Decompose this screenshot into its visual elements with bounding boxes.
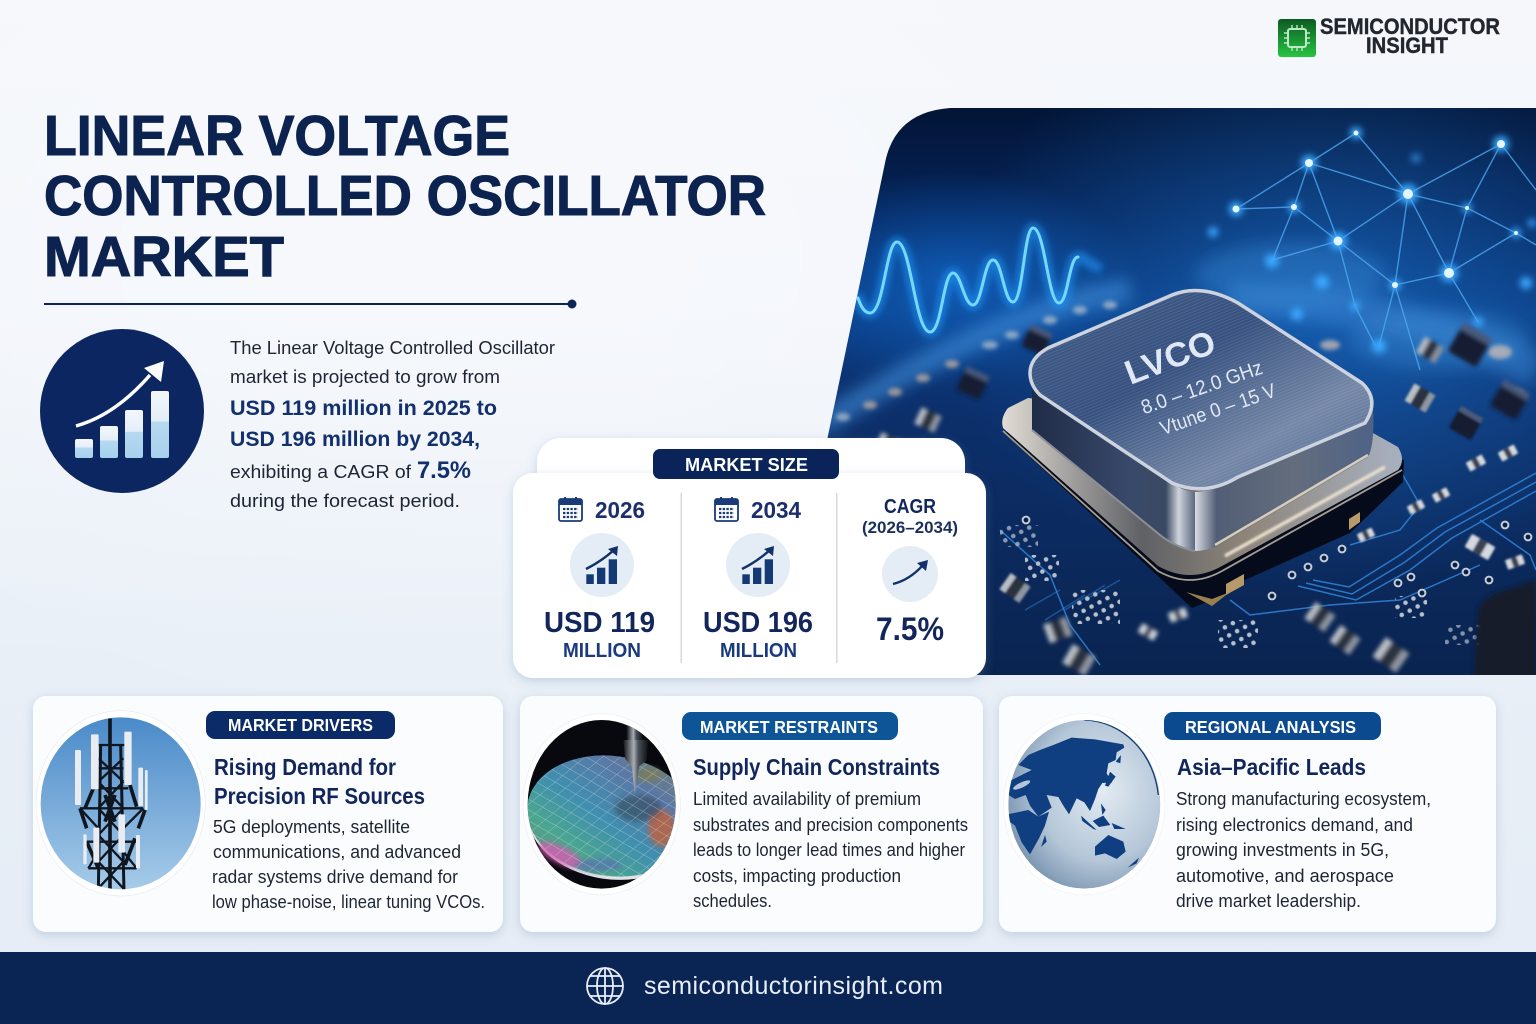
logo: Semiconductor Insight xyxy=(1278,14,1500,58)
panel: market restraints: substrates and precision components xyxy=(693,815,968,835)
panel: market restraints: Limited availability of premium xyxy=(693,789,921,809)
column CAGR xyxy=(862,496,958,647)
panel: regional analysis: REGIONAL ANALYSIS xyxy=(1185,717,1356,737)
LVCO chip xyxy=(1002,290,1404,608)
title xyxy=(44,104,766,289)
panel: market restraints: leads to longer lead times and higher xyxy=(693,840,965,860)
column 2034: USD 196 xyxy=(703,607,813,639)
panel: market restraints: Supply Chain Constraints xyxy=(693,754,940,780)
chip markings: Vtune 0 – 15 V xyxy=(1157,380,1279,440)
board traces xyxy=(1000,470,1536,665)
title: MARKET xyxy=(44,225,284,289)
image: silicon wafer with probe xyxy=(519,714,704,895)
panel: market restraints: schedules. xyxy=(693,891,772,911)
heading pill: MARKET SIZE xyxy=(685,455,808,475)
title rule xyxy=(44,300,576,308)
chip top face xyxy=(1030,290,1372,489)
panel: market restraints xyxy=(519,696,983,932)
hero image: LVCO chip on circuit board xyxy=(760,108,1536,680)
board components near xyxy=(999,383,1525,603)
icon: growth chart in navy circle xyxy=(40,329,204,493)
intro text: USD 196 million by 2034, xyxy=(230,428,480,451)
title: CONTROLLED OSCILLATOR xyxy=(44,164,766,228)
solder pad clusters xyxy=(1000,525,1485,648)
panel: market drivers: Precision RF Sources xyxy=(214,783,425,809)
chip walls xyxy=(1032,385,1195,551)
column 2026: 2026 xyxy=(595,497,645,523)
image: cell tower xyxy=(36,711,207,896)
chip markings: LVCO xyxy=(1120,323,1221,393)
column CAGR: 7.5% xyxy=(876,611,944,647)
card tab xyxy=(537,438,965,508)
waveform xyxy=(858,228,1097,332)
dividers xyxy=(680,493,838,663)
panel: market drivers: Rising Demand for xyxy=(214,754,396,780)
title: LINEAR VOLTAGE xyxy=(44,104,510,168)
column CAGR: (2026–2034) xyxy=(862,519,958,537)
panel: market drivers: 5G deployments, satellite xyxy=(213,817,410,837)
image: globe xyxy=(1004,714,1165,895)
network nodes xyxy=(1208,127,1536,353)
dark block bottom right xyxy=(1474,580,1536,680)
website: semiconductorinsight.com xyxy=(644,972,943,1000)
intro text xyxy=(230,337,555,511)
intro text: exhibiting a CAGR of xyxy=(230,461,412,482)
column 2034: MILLION xyxy=(720,640,797,662)
market size card xyxy=(513,438,986,678)
column 2026: USD 119 xyxy=(544,607,655,639)
column 2034: 2034 xyxy=(751,497,801,523)
column 2026: MILLION xyxy=(563,640,641,662)
chip underside and shadow xyxy=(1003,432,1404,608)
panel: market drivers: radar systems drive demand for xyxy=(212,867,458,887)
circuit network xyxy=(1236,133,1536,370)
panel: regional analysis: drive market leadership. xyxy=(1176,891,1361,911)
logo: Semiconductor Insight: SEMICONDUCTOR xyxy=(1320,14,1500,39)
panel: market drivers xyxy=(33,696,503,932)
panel: regional analysis: Asia–Pacific Leads xyxy=(1177,754,1366,780)
panel: market drivers: MARKET DRIVERS xyxy=(228,715,373,735)
footer bar xyxy=(0,952,1536,1024)
blurred pads along the arc xyxy=(836,301,1525,421)
chip flange xyxy=(1002,398,1402,575)
panel: market drivers: communications, and advanced xyxy=(213,842,461,862)
panel: market restraints: costs, impacting production xyxy=(693,866,901,886)
chip markings xyxy=(1124,332,1273,434)
column CAGR: CAGR xyxy=(884,496,936,518)
board components far xyxy=(876,321,1532,438)
panel: regional analysis: automotive, and aerospace xyxy=(1176,866,1394,886)
heading pill xyxy=(653,449,839,479)
panel: regional analysis: Strong manufacturing ecosystem, xyxy=(1176,789,1431,809)
card body xyxy=(513,473,986,678)
panel: regional analysis: growing investments in 5G, xyxy=(1176,840,1389,860)
panel: regional analysis xyxy=(999,696,1496,932)
intro text: market is projected to grow from xyxy=(230,366,500,387)
glowing arc and bokeh on the board xyxy=(820,243,1536,425)
logo: Semiconductor Insight: INSIGHT xyxy=(1366,33,1449,58)
panel: regional analysis: rising electronics demand, and xyxy=(1176,815,1413,835)
intro text: during the forecast period. xyxy=(230,490,460,511)
panel: market drivers: low phase-noise, linear tuning VCOs. xyxy=(212,892,485,912)
intro text: USD 119 million in 2025 to xyxy=(230,397,497,420)
chip markings: 8.0 – 12.0 GHz xyxy=(1138,357,1266,419)
icon: web globe xyxy=(587,968,623,1004)
intro text: 7.5% xyxy=(417,457,471,484)
column 2026 xyxy=(544,497,655,662)
intro text: The Linear Voltage Controlled Oscillator xyxy=(230,337,555,358)
column 2034 xyxy=(703,497,813,662)
panel: market restraints: MARKET RESTRAINTS xyxy=(700,717,878,737)
